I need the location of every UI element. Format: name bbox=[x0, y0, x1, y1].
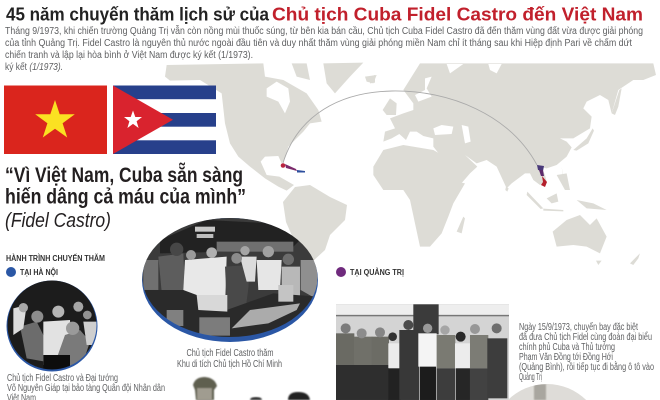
intro paragraph bbox=[5, 24, 643, 73]
photo: Fidel Castro portrait group, bottom bbox=[190, 376, 320, 400]
intro paragraph: chiến tranh và lập lại hòa bình ở Việt Nam được ký kết (1/1973). bbox=[5, 49, 253, 61]
caption: relic site photo bbox=[177, 347, 282, 370]
flight route arc bbox=[283, 91, 537, 165]
section heading: journey: HÀNH TRÌNH CHUYẾN THĂM bbox=[6, 253, 105, 263]
title: 45 năm chuyến thăm lịch sử của bbox=[6, 4, 270, 24]
section label: Quang Tri bbox=[336, 267, 404, 277]
quote: (Fidel Castro) bbox=[5, 210, 111, 232]
photo: Fidel Castro and Vo Nguyen Giap bbox=[6, 280, 98, 372]
caption: Hanoi photo bbox=[7, 372, 165, 400]
section label: Hanoi: TẠI HÀ NỘI bbox=[20, 268, 58, 277]
flag: Cuba bbox=[113, 86, 216, 154]
map: North America and Greenland bbox=[165, 63, 377, 191]
map: South America bbox=[283, 185, 347, 262]
title: Chủ tịch Cuba Fidel Castro đến Việt Nam bbox=[272, 4, 643, 24]
text: Quang Tri description: Phạm Văn Đồng tới Đồng Hới bbox=[519, 351, 613, 363]
photo: visit to Ho Chi Minh relic site bbox=[140, 217, 330, 343]
quote bbox=[5, 163, 246, 232]
photo: road circle, bottom right bbox=[508, 384, 586, 400]
section label: Hanoi bbox=[6, 267, 58, 277]
caption: Hanoi photo: Võ Nguyên Giáp tại bảo tàng Quân đội Nhân dân bbox=[7, 383, 165, 394]
caption: relic site photo: Chủ tịch Fidel Castro thăm bbox=[186, 347, 274, 359]
quote: hiến dâng cả máu của mình” bbox=[5, 186, 246, 208]
text: Quang Tri description bbox=[519, 321, 654, 383]
map: Eurasia bbox=[370, 63, 656, 190]
caption: Hanoi photo: Chủ tịch Fidel Castro và Đại tướng bbox=[7, 372, 118, 384]
section label: Quang Tri: TẠI QUẢNG TRỊ bbox=[350, 268, 404, 277]
title bbox=[6, 4, 643, 24]
photo: group in Quang Tri bbox=[336, 304, 509, 400]
marker: Vietnam bbox=[537, 165, 547, 187]
marker: Cuba bbox=[281, 163, 305, 172]
caption: relic site photo: Khu di tích Chủ tịch Hồ Chí Minh bbox=[177, 358, 282, 370]
text: Quang Tri description: Quảng Trị bbox=[519, 372, 542, 383]
text: Quang Tri description: chính phủ Cuba và Thủ tướng bbox=[519, 341, 615, 353]
quote: “Vì Việt Nam, Cuba sẵn sàng bbox=[5, 163, 243, 187]
flag: Vietnam bbox=[4, 86, 107, 154]
intro paragraph: ký kết (1/1973). bbox=[5, 61, 63, 73]
world map bbox=[165, 63, 656, 265]
map: Africa and Oceania bbox=[373, 145, 640, 265]
